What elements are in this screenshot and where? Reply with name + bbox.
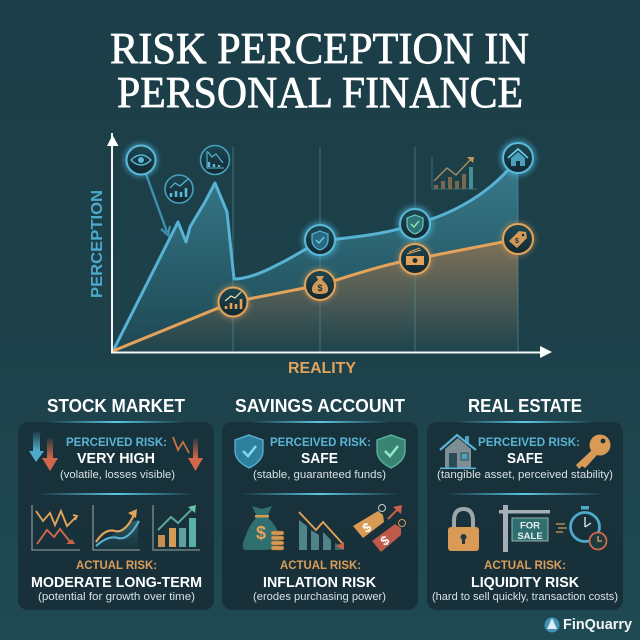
brand logo: FinQuarry xyxy=(563,616,633,633)
actual text: LIQUIDITY RISK xyxy=(471,574,579,591)
perceived text: (stable, guaranteed funds) xyxy=(253,469,386,481)
icon: house xyxy=(500,140,536,176)
icon: blue shield xyxy=(302,222,338,258)
icon: blue shield xyxy=(235,435,263,468)
divider xyxy=(240,493,400,495)
title: PERSONAL FINANCE xyxy=(117,68,523,117)
perceived text xyxy=(437,435,613,481)
actual text: ACTUAL RISK: xyxy=(76,558,157,572)
heading: SAVINGS ACCOUNT xyxy=(235,396,405,416)
actual text xyxy=(432,558,618,603)
arrow from eye icon xyxy=(146,174,170,235)
perceived text: PERCEIVED RISK: xyxy=(478,435,580,449)
perceived text: VERY HIGH xyxy=(77,450,155,467)
icon: volatile chart xyxy=(32,505,80,550)
guide lines xyxy=(233,147,518,351)
icon: rising lines chart xyxy=(93,505,140,550)
icon: eye xyxy=(124,143,158,177)
panel xyxy=(427,422,623,610)
perceived text: (volatile, losses visible) xyxy=(60,469,175,481)
perceived text: SAFE xyxy=(301,450,338,467)
divider xyxy=(445,493,605,495)
icon: money bag: $ xyxy=(317,283,323,293)
icon: zigzag arrow right xyxy=(173,437,203,471)
x axis label: REALITY xyxy=(288,360,356,377)
actual text: MODERATE LONG-TERM xyxy=(31,574,202,591)
actual text xyxy=(31,558,202,603)
panel xyxy=(18,422,214,610)
icon: for sale sign: SALE xyxy=(517,531,543,542)
icon: cash xyxy=(398,242,432,276)
actual text: ACTUAL RISK: xyxy=(484,558,566,572)
icon: house xyxy=(440,435,476,469)
icon: bars chart xyxy=(153,505,200,550)
actual text: (potential for growth over time) xyxy=(38,591,195,603)
icon: rising bars xyxy=(165,175,193,203)
top glow line xyxy=(46,421,186,423)
icon: for sale sign: FOR xyxy=(520,520,540,532)
icon: money bag with coins: $ xyxy=(256,523,266,543)
top glow line xyxy=(250,421,390,423)
actual text: (hard to sell quickly, transaction costs) xyxy=(432,591,618,603)
perceived text xyxy=(60,435,175,481)
icon: padlock xyxy=(448,509,479,551)
small growth chart xyxy=(432,157,477,189)
orange reality area xyxy=(113,239,518,351)
chart: perception vs reality xyxy=(89,133,552,377)
top glow line xyxy=(455,421,595,423)
icon: price tag: $ xyxy=(515,238,519,245)
perceived text xyxy=(253,435,386,481)
icon: price tag xyxy=(501,222,535,256)
perceived text: PERCEIVED RISK: xyxy=(66,435,167,449)
icon: money bag with coins xyxy=(243,506,284,550)
title: RISK PERCEPTION IN xyxy=(110,24,529,73)
icon: money bag xyxy=(303,268,337,302)
heading: STOCK MARKET xyxy=(47,396,185,416)
divider xyxy=(36,493,196,495)
axes xyxy=(107,133,552,358)
heading: REAL ESTATE xyxy=(468,396,582,416)
icon: down arrows left xyxy=(29,432,58,471)
y axis label: PERCEPTION xyxy=(89,190,106,298)
blue perception line xyxy=(113,158,518,351)
orange reality line xyxy=(113,239,518,351)
actual text: (erodes purchasing power) xyxy=(253,591,386,603)
actual text xyxy=(253,558,386,603)
actual text: ACTUAL RISK: xyxy=(280,558,361,572)
icon: green shield xyxy=(397,206,433,242)
panel xyxy=(222,422,418,610)
icon: stopwatch xyxy=(556,506,606,550)
column: real estate xyxy=(427,396,623,610)
icon: price tags xyxy=(353,504,406,552)
perceived text: PERCEIVED RISK: xyxy=(270,435,371,449)
icon: price tags: $ xyxy=(359,519,375,536)
column: savings account xyxy=(222,396,418,610)
column: stock market xyxy=(18,396,214,610)
icon: orange growth chart xyxy=(216,285,250,319)
actual text: INFLATION RISK xyxy=(263,574,376,591)
icon: declining chart xyxy=(200,146,230,174)
blue perception area xyxy=(113,158,518,351)
icon: price tags: $ xyxy=(377,532,393,549)
perceived text: (tangible asset, perceived stability) xyxy=(437,469,613,481)
icon: for sale sign xyxy=(499,505,550,552)
icon: key xyxy=(576,434,610,469)
icon: declining bars xyxy=(299,512,344,550)
perceived text: SAFE xyxy=(507,450,543,467)
title xyxy=(110,24,529,117)
icon: green shield xyxy=(377,435,405,468)
